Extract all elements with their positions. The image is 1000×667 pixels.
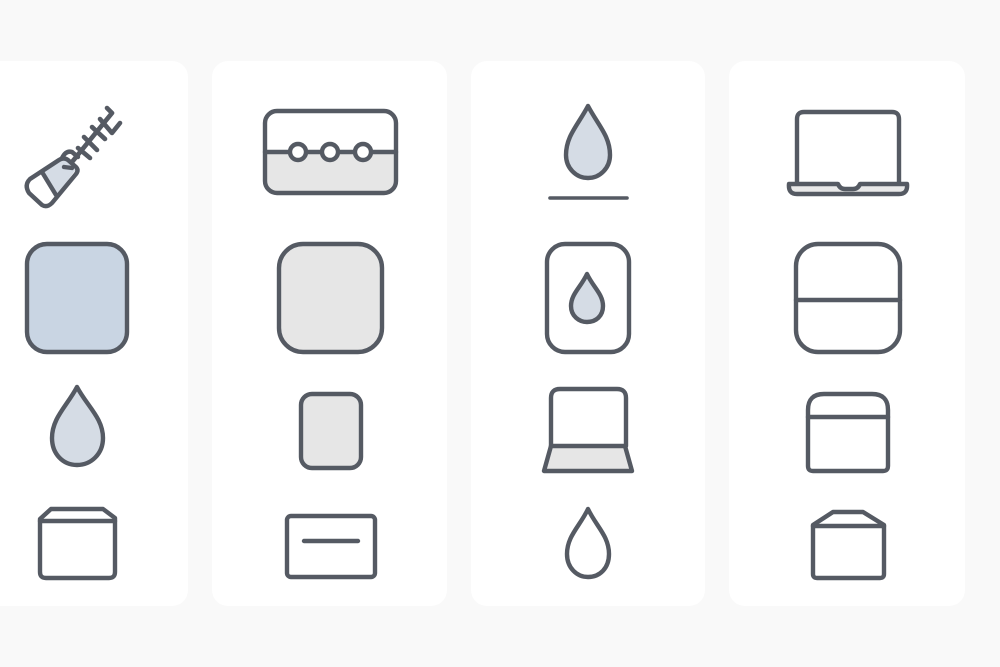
- icon: outline drop: [567, 509, 609, 577]
- icon: blue rounded square: [27, 244, 127, 352]
- icon: lidded rectangle: [808, 394, 888, 471]
- icon: zipper: [27, 108, 120, 206]
- card background 3: [471, 61, 705, 606]
- icon: tile with drop: [547, 244, 629, 352]
- icon: laptop front: [789, 112, 907, 194]
- icon: filled drop: [52, 387, 103, 465]
- panel: column 2: [212, 61, 447, 606]
- icon: split rounded square: [796, 244, 900, 352]
- icon: box: [40, 509, 115, 578]
- panel: column 3: [471, 61, 705, 606]
- icon: open-top box: [813, 512, 884, 578]
- icon: card with three dots: [265, 111, 396, 193]
- panel: column 4: [729, 61, 965, 606]
- icon: small grey rectangle: [301, 394, 361, 468]
- card background 1: [0, 61, 188, 606]
- card background 4: [729, 61, 965, 606]
- icon: rectangle with dash: [287, 516, 375, 577]
- icon: drop above line: [550, 106, 627, 198]
- icon: grey rounded square: [279, 244, 382, 352]
- icon: open laptop: [544, 389, 632, 471]
- panel: column 1: [0, 61, 188, 606]
- card background 2: [212, 61, 447, 606]
